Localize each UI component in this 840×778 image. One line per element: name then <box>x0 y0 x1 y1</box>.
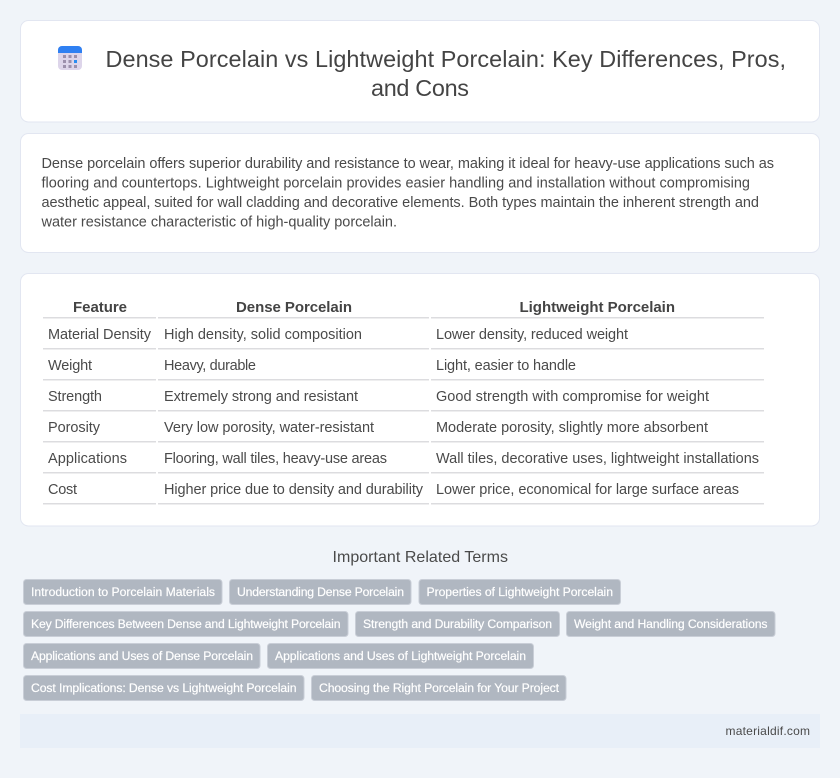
tag: choosing porcelain: Choosing the Right Porcelain for Your Project <box>319 681 560 695</box>
tag: cost implications: Cost Implications: Dense vs Lightweight Porcelain <box>31 681 296 695</box>
tag: uses lightweight <box>268 644 534 668</box>
table row: porosity: Very low porosity, water-resistant <box>164 420 374 436</box>
table row: weight <box>43 358 764 380</box>
table row: weight: Weight <box>48 358 92 374</box>
table row: cost: Cost <box>48 482 77 498</box>
table row: porosity: Porosity <box>48 420 101 436</box>
panel: comparison table <box>20 274 820 526</box>
footer <box>20 714 820 748</box>
table row: applications: Flooring, wall tiles, heavy-use areas <box>164 451 387 467</box>
text block: summary <box>40 156 774 230</box>
tag: properties lightweight: Properties of Lightweight Porcelain <box>426 585 613 599</box>
text block: summary: flooring and countertops. Lightweight porcelain provides easier handling and installation without compromising <box>42 176 750 192</box>
text block: summary: water resistance characteristic of high-quality porcelain. <box>40 214 397 230</box>
table row: applications: Wall tiles, decorative uses, lightweight installations <box>436 451 759 467</box>
panel: header <box>20 20 820 122</box>
table row: cost: Lower price, economical for large surface areas <box>436 482 739 498</box>
heading: related terms: Important Related Terms <box>332 549 508 566</box>
table row: material density: Lower density, reduced weight <box>436 327 628 343</box>
table header: Feature <box>73 299 127 316</box>
tag: strength comparison <box>356 612 560 636</box>
table row: strength: Good strength with compromise for weight <box>436 389 709 405</box>
icon: calendar <box>58 46 82 70</box>
tag: properties lightweight <box>419 580 620 604</box>
table row: porosity: Moderate porosity, slightly more absorbent <box>436 420 708 436</box>
text block: summary: Dense porcelain offers superior durability and resistance to wear, making it ideal for heavy-use applications such as <box>42 156 774 172</box>
table header: Lightweight Porcelain <box>520 299 675 316</box>
table row: strength <box>43 389 764 412</box>
table row: porosity <box>43 420 764 442</box>
table row: cost <box>43 482 764 504</box>
tag: uses dense: Applications and Uses of Dense Porcelain <box>31 649 253 663</box>
footer: materialdif.com <box>726 724 810 738</box>
tag: weight handling <box>566 612 775 636</box>
tag: understanding dense <box>230 580 411 604</box>
tag: uses lightweight: Applications and Uses of Lightweight Porcelain <box>275 649 526 663</box>
table header: Dense Porcelain <box>236 299 352 316</box>
table row: weight: Light, easier to handle <box>436 358 576 374</box>
text block: summary: aesthetic appeal, suited for wall cladding and decorative elements. Both types maintain the inherent strength and <box>42 195 759 211</box>
table row: weight: Heavy, durable <box>164 358 256 374</box>
table row: applications: Applications <box>48 451 127 467</box>
title: and Cons <box>371 75 469 101</box>
table header <box>43 299 764 318</box>
tag: strength comparison: Strength and Durability Comparison <box>363 617 552 631</box>
tag: key differences: Key Differences Between Dense and Lightweight Porcelain <box>31 617 340 631</box>
title: Dense Porcelain vs Lightweight Porcelain: Key Differences, Pros, <box>106 46 786 72</box>
tag: uses dense <box>24 644 260 668</box>
tag: choosing porcelain <box>312 676 566 700</box>
related terms tags <box>24 580 775 700</box>
tag: cost implications <box>24 676 304 700</box>
tag: understanding dense: Understanding Dense Porcelain <box>237 585 404 599</box>
tag: weight handling: Weight and Handling Considerations <box>574 617 768 631</box>
table row: applications <box>43 451 764 474</box>
table row: strength: Strength <box>48 389 102 405</box>
table row: strength: Extremely strong and resistant <box>164 389 358 405</box>
table row: material density <box>43 327 764 350</box>
panel: summary paragraph <box>20 134 820 252</box>
tag: introduction <box>24 580 222 604</box>
tag: key differences <box>24 612 348 636</box>
title <box>106 46 786 101</box>
table row: material density: High density, solid composition <box>164 327 362 343</box>
table row: material density: Material Density <box>48 327 152 343</box>
tag: introduction: Introduction to Porcelain Materials <box>31 585 215 599</box>
table row: cost: Higher price due to density and durability <box>164 482 424 498</box>
